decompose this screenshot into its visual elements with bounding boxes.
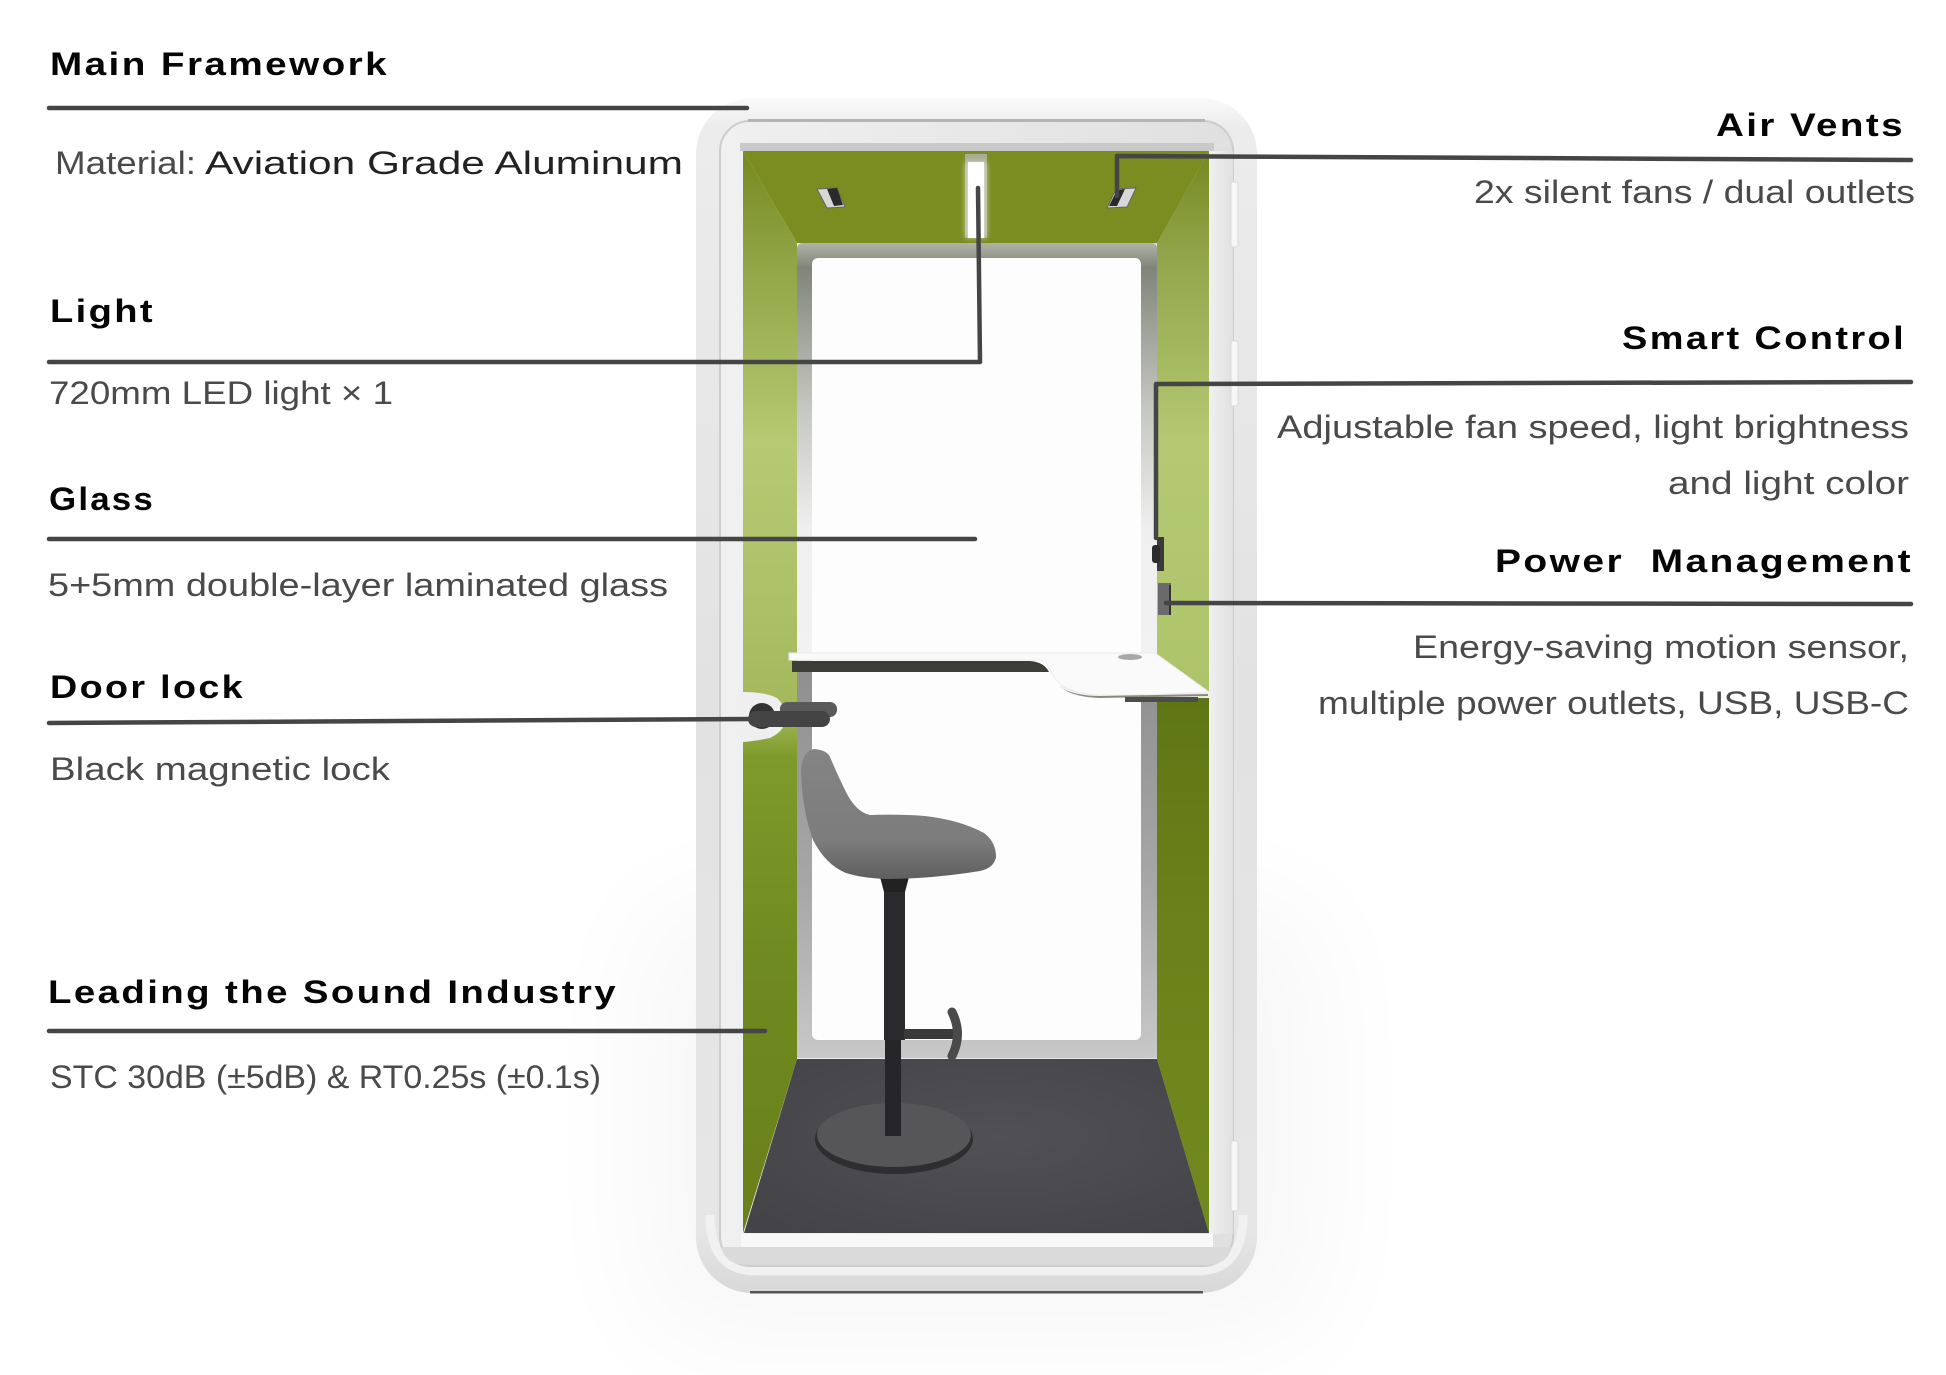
leader line [1117, 156, 1911, 196]
callout: main framework [49, 46, 747, 181]
description line two: multiple power outlets, USB, USB-C [1318, 685, 1909, 721]
frame inner bevel [740, 143, 1214, 151]
callout: sound [48, 974, 765, 1095]
description: 2x silent fans / dual outlets [1474, 174, 1915, 210]
material description: Material: [55, 145, 196, 181]
material value: Aviation Grade Aluminum [205, 145, 683, 181]
leader line [49, 188, 980, 362]
heading: Air Vents [1716, 107, 1905, 143]
booth outer shell [696, 98, 1257, 1293]
stool column [885, 1040, 901, 1136]
door hinges [1231, 182, 1238, 1211]
left wall panel [743, 151, 797, 1233]
glass surround frame [797, 243, 1157, 1058]
bar stool [801, 749, 996, 1174]
leader line [1166, 603, 1911, 604]
description: 5+5mm double-layer laminated glass [48, 567, 668, 603]
LED light fixture [965, 154, 987, 238]
inner frame band [720, 121, 1233, 1266]
callout: power management [1166, 543, 1913, 721]
callout: smart control [1156, 320, 1911, 538]
desk [789, 653, 1209, 702]
ceiling panel [743, 151, 1209, 243]
heading: Door lock [50, 669, 245, 705]
base shadow [750, 1291, 1203, 1294]
leader line [49, 537, 975, 541]
leader line [49, 719, 755, 723]
lower frame panel [721, 1247, 1232, 1265]
door lock handle [748, 702, 837, 729]
heading: Leading the Sound Industry [48, 974, 618, 1010]
smart control panel [1152, 537, 1164, 571]
leader line [1156, 382, 1911, 538]
description line one: Energy-saving motion sensor, [1413, 629, 1909, 665]
stool footrest [904, 1029, 954, 1039]
phone booth illustration [696, 98, 1257, 1294]
heading: Smart Control [1622, 320, 1906, 356]
right wall panel [1157, 151, 1209, 1233]
description line two: and light color [1668, 465, 1909, 501]
leader line [49, 1029, 765, 1033]
right door stile [1209, 151, 1233, 1234]
description: Black magnetic lock [50, 751, 391, 787]
door sill [741, 1234, 1213, 1247]
leader line [49, 106, 747, 110]
door handle cutout [743, 692, 785, 742]
description line one: Adjustable fan speed, light brightness [1277, 409, 1909, 445]
ground shadow [640, 900, 1320, 1340]
description: 720mm LED light × 1 [49, 375, 393, 411]
callout: light [49, 188, 980, 411]
power outlet panel [1158, 583, 1171, 615]
heading: Light [50, 293, 155, 329]
heading: Glass [49, 481, 155, 517]
right air vent [1107, 188, 1136, 208]
left air vent [817, 188, 845, 208]
top frame shadow line [748, 119, 1205, 122]
stool seat [801, 749, 996, 879]
callout: glass [48, 481, 975, 603]
callout: air vents [1117, 107, 1915, 210]
description: STC 30dB (±5dB) & RT0.25s (±0.1s) [50, 1059, 601, 1095]
stool base [815, 1104, 973, 1174]
callout: door lock [49, 669, 755, 787]
heading: Main Framework [50, 46, 389, 82]
heading: Power Management [1495, 543, 1913, 579]
rear glass panel [812, 258, 1141, 1040]
lower light band [710, 1215, 1243, 1271]
carpet floor [744, 1059, 1209, 1233]
